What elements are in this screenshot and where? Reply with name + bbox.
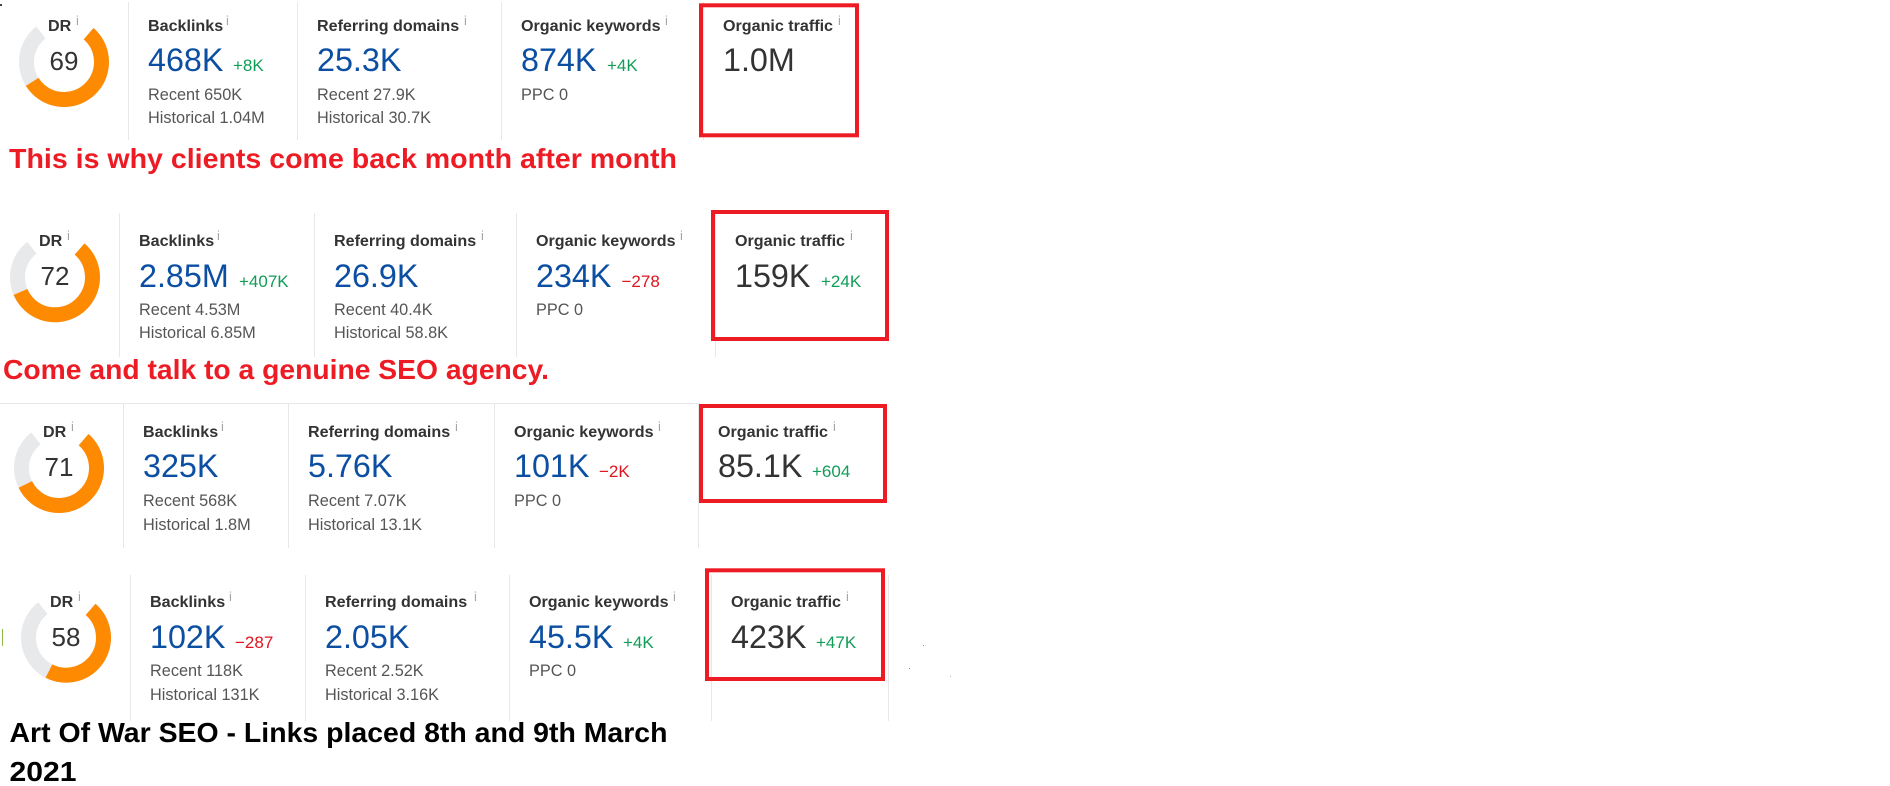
organic traffic metric: i (850, 228, 853, 243)
organic traffic metric: 423K (731, 619, 807, 655)
backlinks metric: 2.85M (139, 258, 229, 294)
referring domains metric: 5.76K (308, 448, 393, 484)
DR gauge 58: i (78, 589, 81, 604)
referring domains metric: i (474, 589, 477, 604)
referring domains metric: Recent 2.52K (325, 662, 424, 680)
metrics row 3 (0, 403, 885, 548)
organic traffic metric (723, 13, 841, 78)
referring domains metric: i (481, 228, 484, 243)
organic traffic metric: 159K (735, 258, 811, 294)
organic traffic metric (718, 419, 850, 484)
backlinks metric: i (217, 228, 220, 243)
backlinks metric (143, 419, 251, 534)
backlinks metric: i (229, 589, 232, 604)
DR gauge 69 (11, 9, 117, 115)
referring domains metric: Recent 27.9K (317, 86, 416, 104)
backlinks metric: Backlinks (143, 423, 218, 441)
red highlight box (701, 406, 885, 501)
organic keywords metric (536, 228, 683, 319)
organic keywords metric: i (673, 589, 676, 604)
organic keywords metric: PPC 0 (529, 662, 576, 680)
referring domains metric: Historical 3.16K (325, 686, 439, 704)
organic keywords metric (521, 13, 668, 104)
DR gauge 71: i (71, 419, 74, 434)
referring domains metric: i (455, 419, 458, 434)
referring domains metric: Referring domains (317, 17, 459, 35)
organic keywords metric (514, 419, 661, 510)
organic traffic metric (735, 228, 862, 294)
DR gauge 58 (13, 585, 119, 691)
DR gauge 72 (2, 224, 108, 330)
DR gauge 71 (6, 415, 112, 521)
red highlight box (707, 570, 883, 679)
red caption 2: Come and talk to a genuine SEO agency. (3, 354, 549, 385)
organic keywords metric (529, 589, 676, 680)
DR gauge 72: i (67, 228, 70, 243)
organic keywords metric: 101K (514, 448, 590, 484)
DR gauge 69: DR (48, 17, 72, 35)
organic keywords metric: i (665, 13, 668, 28)
referring domains metric: Referring domains (308, 423, 450, 441)
organic keywords metric: i (658, 419, 661, 434)
organic traffic metric: i (833, 419, 836, 434)
organic keywords metric: Organic keywords (521, 17, 661, 35)
referring domains metric: Historical 58.8K (334, 324, 448, 342)
backlinks metric: Recent 4.53M (139, 301, 240, 319)
organic keywords metric: 234K (536, 258, 612, 294)
backlinks metric (148, 13, 265, 127)
referring domains metric (334, 228, 484, 342)
organic traffic metric: i (846, 589, 849, 604)
referring domains metric: 25.3K (317, 42, 402, 78)
backlinks metric: Recent 118K (150, 662, 243, 680)
backlinks metric: 468K (148, 42, 224, 78)
red caption 1: This is why clients come back month after month (9, 143, 677, 174)
DR gauge 69: i (76, 13, 79, 28)
organic traffic metric: +47K (816, 633, 857, 652)
organic traffic metric: 1.0M (723, 42, 795, 78)
organic traffic metric: Organic traffic (723, 17, 833, 35)
backlinks metric (139, 228, 289, 342)
referring domains metric: Historical 13.1K (308, 516, 422, 534)
referring domains metric: Referring domains (334, 232, 476, 250)
organic traffic metric: Organic traffic (731, 593, 841, 611)
backlinks metric: Historical 1.8M (143, 516, 251, 534)
black caption: Art Of War SEO - Links placed 8th and 9th March (10, 717, 668, 748)
organic keywords metric: 45.5K (529, 619, 614, 655)
backlinks metric: i (221, 419, 224, 434)
organic traffic metric: +604 (812, 462, 850, 481)
backlinks metric: Historical 1.04M (148, 109, 265, 127)
backlinks metric: i (226, 13, 229, 28)
DR gauge 72: DR (39, 232, 63, 250)
organic keywords metric: +4K (623, 633, 654, 652)
organic traffic metric: +24K (821, 272, 862, 291)
backlinks metric: Backlinks (150, 593, 225, 611)
referring domains metric: Historical 30.7K (317, 109, 431, 127)
organic keywords metric: Organic keywords (529, 593, 669, 611)
organic keywords metric: i (680, 228, 683, 243)
DR gauge 72: 72 (41, 261, 69, 291)
organic traffic metric: 85.1K (718, 448, 803, 484)
DR gauge 58: 58 (52, 622, 80, 652)
organic keywords metric: PPC 0 (514, 492, 561, 510)
organic keywords metric: +4K (607, 56, 638, 75)
metrics row 1 (11, 2, 857, 140)
organic keywords metric: Organic keywords (514, 423, 654, 441)
organic traffic metric (731, 589, 857, 655)
organic traffic metric: Organic traffic (735, 232, 845, 250)
organic keywords metric: 874K (521, 42, 597, 78)
organic keywords metric: PPC 0 (521, 86, 568, 104)
DR gauge 58: DR (50, 593, 74, 611)
backlinks metric: Recent 650K (148, 86, 242, 104)
referring domains metric: Recent 7.07K (308, 492, 407, 510)
referring domains metric: Referring domains (325, 593, 467, 611)
backlinks metric: Recent 568K (143, 492, 237, 510)
referring domains metric (308, 419, 458, 534)
black caption (10, 717, 668, 786)
backlinks metric (150, 589, 273, 704)
backlinks metric: Backlinks (148, 17, 223, 35)
DR gauge 71: DR (43, 423, 67, 441)
referring domains metric (325, 589, 477, 704)
backlinks metric: 325K (143, 448, 219, 484)
referring domains metric: 26.9K (334, 258, 419, 294)
backlinks metric: 102K (150, 619, 226, 655)
backlinks metric: Historical 6.85M (139, 324, 256, 342)
organic keywords metric: Organic keywords (536, 232, 676, 250)
organic keywords metric: PPC 0 (536, 301, 583, 319)
backlinks metric: +407K (239, 272, 289, 291)
DR gauge 69: 69 (50, 46, 78, 76)
organic traffic metric: i (838, 13, 841, 28)
backlinks metric: −287 (235, 633, 273, 652)
red highlight box (701, 5, 857, 135)
DR gauge 71: 71 (45, 452, 73, 482)
backlinks metric: Backlinks (139, 232, 214, 250)
metrics row 4 (13, 570, 888, 721)
metrics row 2 (2, 212, 887, 357)
referring domains metric: 2.05K (325, 619, 410, 655)
red highlight box (713, 212, 887, 339)
backlinks metric: Historical 131K (150, 686, 260, 704)
referring domains metric: i (464, 13, 467, 28)
organic keywords metric: −278 (622, 272, 660, 291)
referring domains metric (317, 13, 467, 127)
referring domains metric: Recent 40.4K (334, 301, 433, 319)
backlinks metric: +8K (233, 56, 264, 75)
organic keywords metric: −2K (599, 462, 630, 481)
organic traffic metric: Organic traffic (718, 423, 828, 441)
